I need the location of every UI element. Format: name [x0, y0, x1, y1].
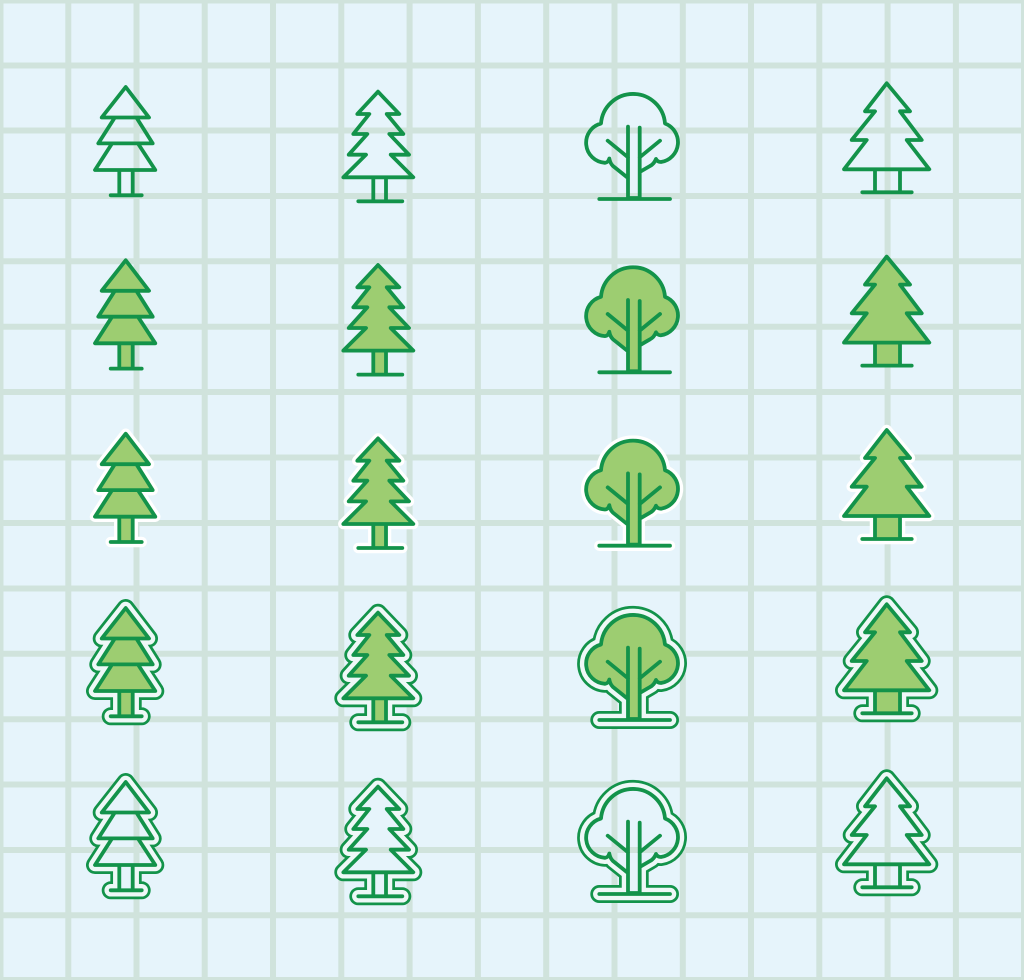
icon: wide fir, outline with outer ring, row 5 — [844, 778, 929, 887]
icon: wide fir, filled with outer ring, row 4 — [844, 604, 929, 713]
icon: round tree, filled with outer ring, row 4 — [586, 615, 678, 720]
icon: tiered pine, outline, row 1 — [95, 87, 155, 195]
icon: round tree, filled, row 2 — [586, 267, 678, 372]
icon: tiered pine, filled, row 2 — [95, 260, 155, 369]
icon: tiered pine, filled with outer ring, row 4 — [95, 608, 155, 716]
icon: round tree, outline, row 1 — [586, 94, 678, 199]
icon: jagged fir, outline with outer ring, row 5 — [343, 787, 413, 896]
icon: tiered pine, white sticker edge, row 3 — [95, 434, 155, 542]
icon: wide fir, outline, row 1 — [844, 83, 929, 192]
icon: jagged fir, white sticker edge, row 3 — [343, 438, 413, 548]
icon: wide fir, filled, row 2 — [844, 257, 929, 366]
icon: jagged fir, outline, row 1 — [343, 92, 413, 201]
icon: jagged fir, filled with outer ring, row 4 — [343, 613, 413, 722]
icon: jagged fir, filled, row 2 — [343, 265, 413, 375]
icon: round tree, outline with outer ring, row 5 — [586, 789, 678, 894]
icon: round tree, white sticker edge, row 3 — [586, 441, 678, 546]
icon: tiered pine, outline with outer ring, row 5 — [95, 782, 155, 890]
icon: wide fir, white sticker edge, row 3 — [844, 430, 929, 539]
